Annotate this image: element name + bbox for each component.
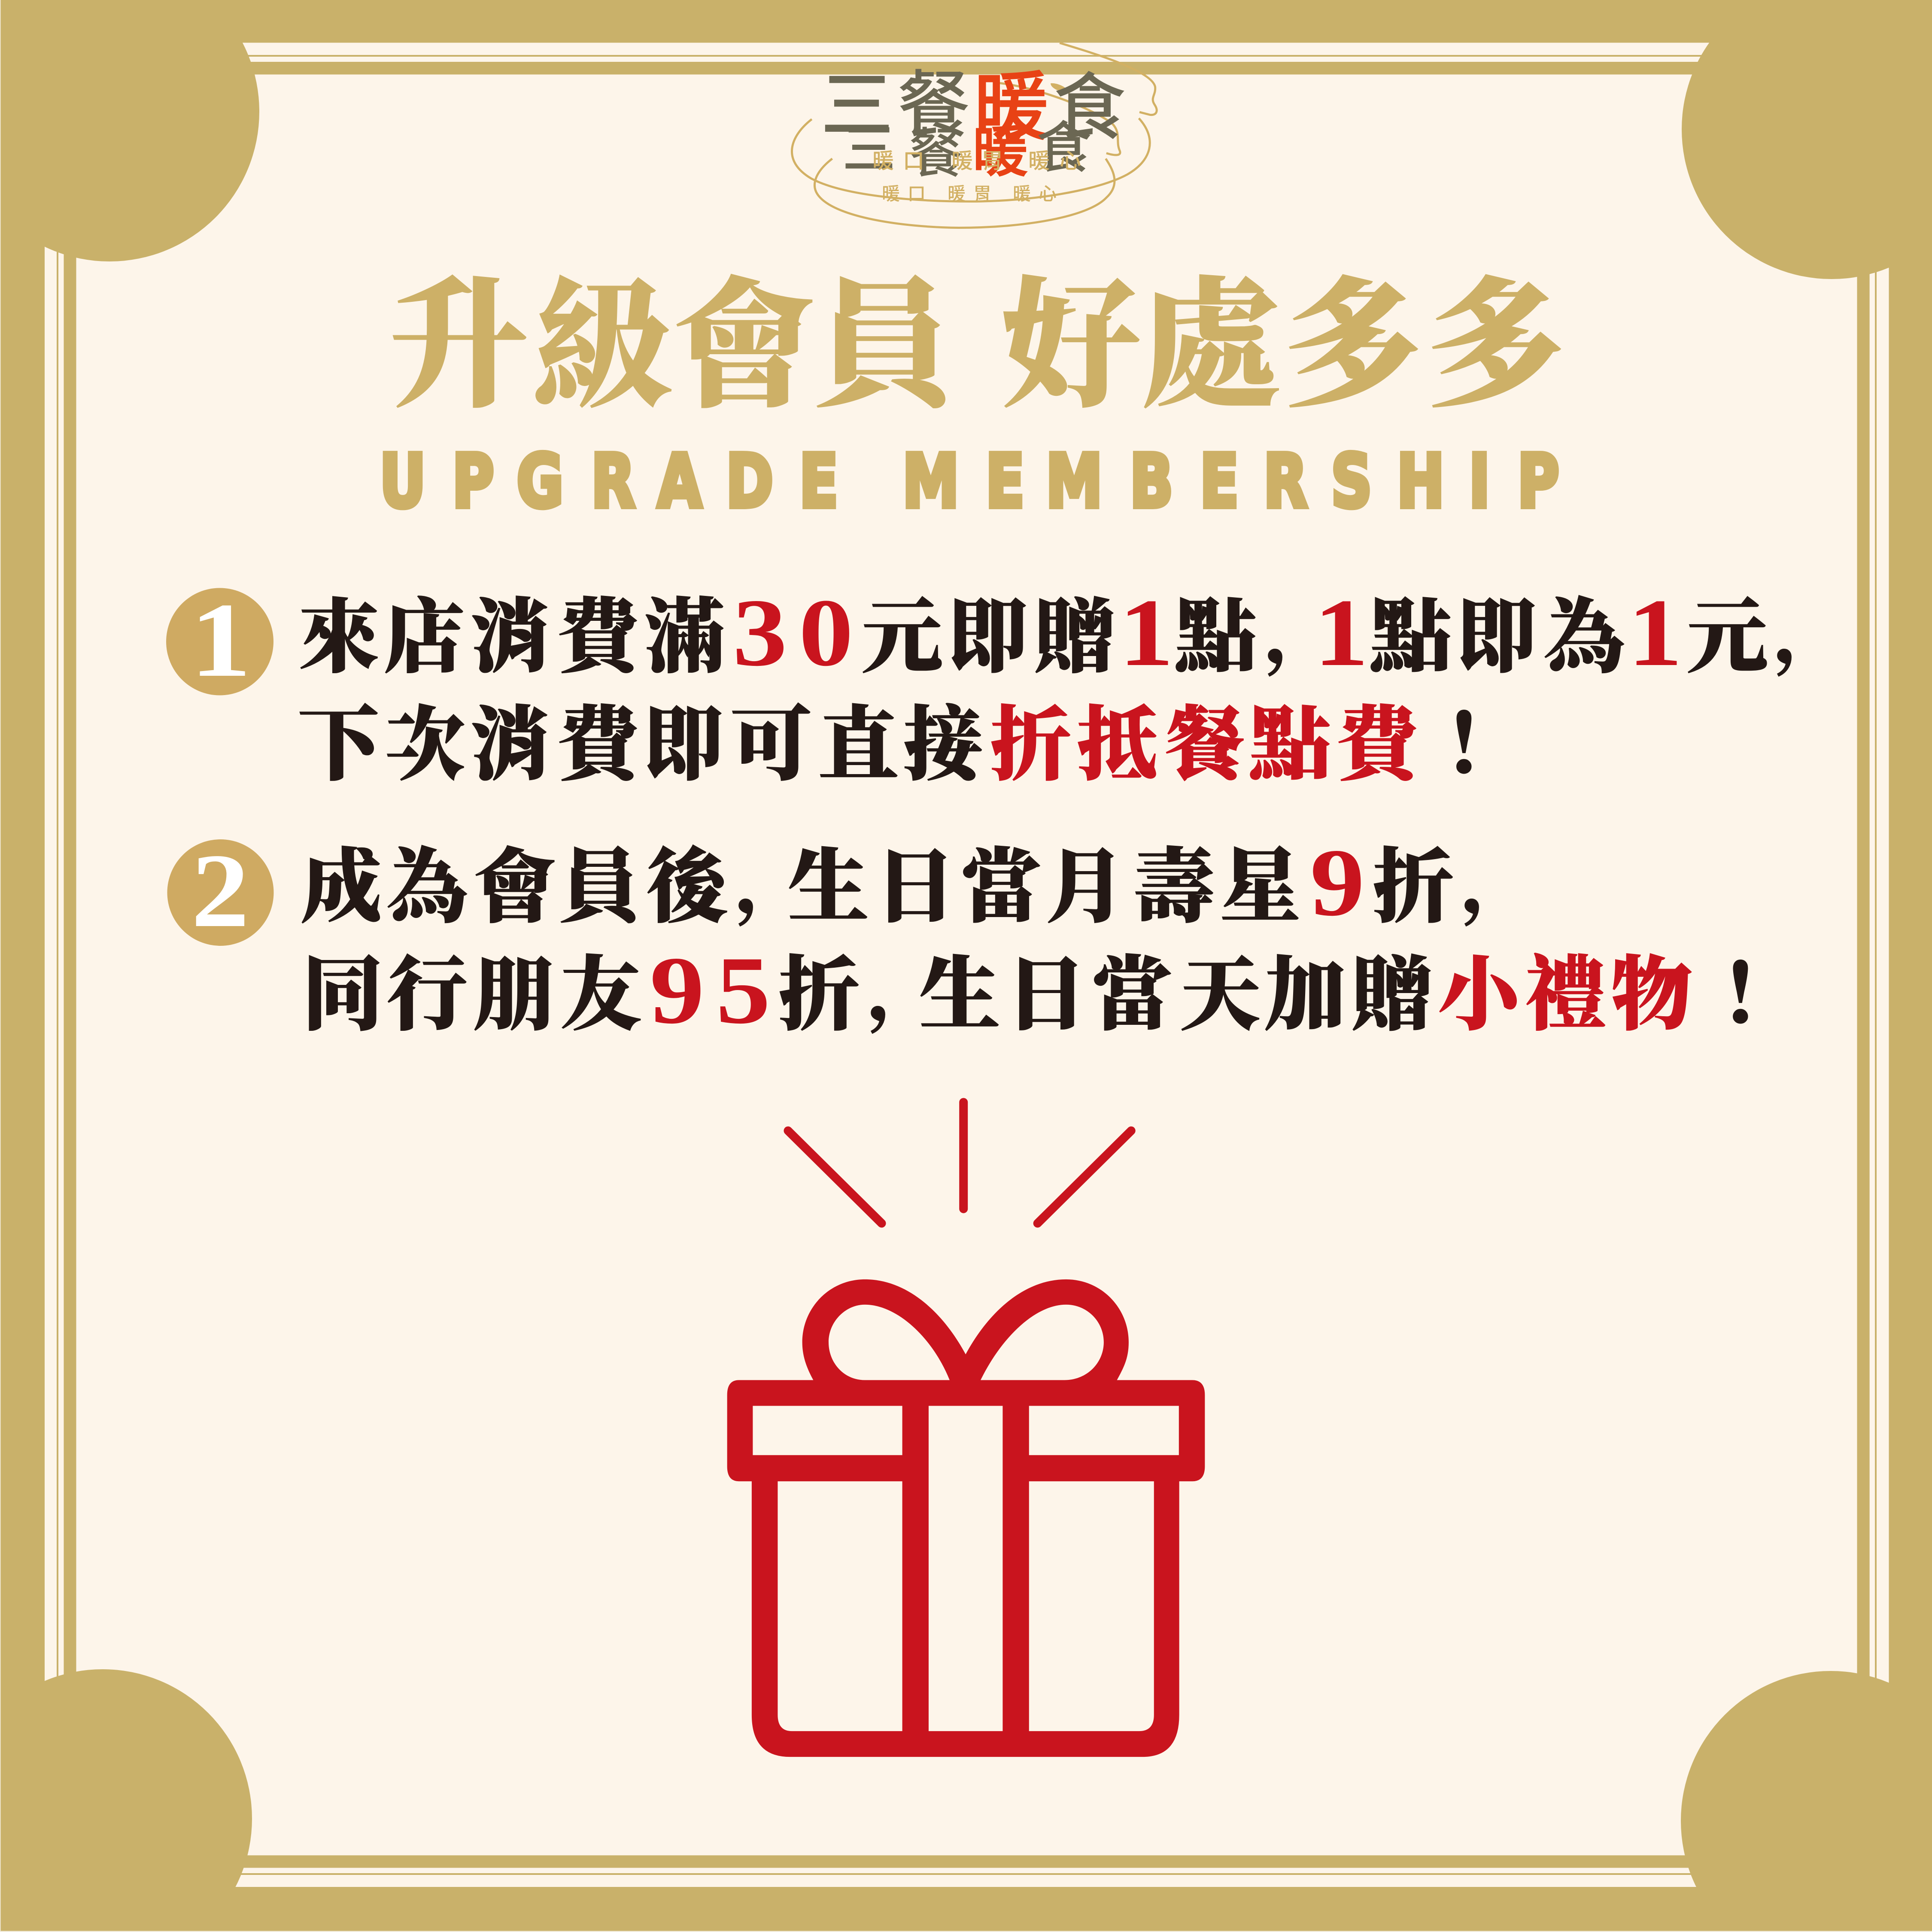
benefit 2 line 1: 折 — [1373, 843, 1454, 933]
benefit 1 line 1: 元 — [1687, 593, 1768, 683]
logo accent small: 暖 — [972, 121, 1028, 183]
subtitle: UPGRADE MEMBERSHIP — [380, 439, 1559, 524]
number badge 1: 1 — [190, 581, 251, 699]
logo rings — [792, 43, 1157, 228]
benefit 2 line 2: ！ — [1720, 951, 1801, 1040]
benefit 2 line 2: 折 — [779, 951, 860, 1040]
benefit 1 line 1: 30 — [732, 579, 854, 686]
logo: 三餐暖食 with rings — [792, 43, 1157, 228]
logo slogan lower: 暖口暖胃暖心 — [882, 184, 1057, 204]
benefit 2 line 2: ， — [869, 956, 937, 1034]
logo slogan upper: 暖口暖胃暖心 — [872, 149, 1081, 173]
logo name small end: 食 — [1036, 117, 1092, 179]
number badge 2 — [167, 832, 274, 949]
benefit 2 line 1: ， — [736, 848, 805, 927]
title: 升級會員 好處多多 — [390, 270, 1567, 425]
number badge 2: 2 — [191, 832, 249, 949]
benefit 1 line 1: 來店消費滿 — [299, 593, 725, 683]
benefit 1 line 1: 1 — [1119, 579, 1174, 686]
logo name large end: 食 — [1053, 67, 1126, 149]
benefit 1 line 1: ， — [1266, 598, 1334, 677]
benefit 2 line 2: 生日當天加贈 — [920, 951, 1432, 1040]
benefit 2 line 1: 成為會員後 — [301, 843, 732, 933]
number badge 1 — [166, 581, 273, 699]
benefit 2 line 1: 9 — [1310, 829, 1365, 936]
benefit 1 line 1 — [299, 579, 1844, 686]
benefit 1 line 2 — [298, 701, 1525, 790]
benefit 2 line 1: ， — [1462, 848, 1531, 927]
benefit 1 line 2: 折抵餐點費 — [990, 701, 1430, 790]
benefit 1 line 2: ！ — [1444, 701, 1525, 790]
benefit 1 line 2: 下次消費即可直接 — [298, 701, 986, 790]
icon: gift box — [727, 1279, 1205, 1757]
benefit 2 line 2: 95 — [650, 936, 771, 1044]
benefit 1 line 1: 1 — [1628, 579, 1683, 686]
benefit 2 line 2: 小禮物 — [1438, 951, 1692, 1040]
benefit 1 line 1: 1 — [1314, 579, 1369, 686]
benefit 2 line 2 — [302, 936, 1801, 1044]
logo name small: 三餐 — [842, 119, 963, 184]
logo accent large: 暖 — [974, 66, 1049, 149]
benefit 2 line 1: 生日當月壽星 — [788, 843, 1300, 933]
benefit 1 line 1: 點即為 — [1370, 593, 1625, 683]
icon: sparkle rays — [788, 1102, 1131, 1223]
benefit 1 line 1: 元即贈 — [862, 593, 1115, 683]
benefit 2 line 2: 同行朋友 — [302, 951, 641, 1040]
benefit 1 line 1: ， — [1775, 598, 1844, 677]
benefit 1 line 1: 點 — [1175, 593, 1256, 683]
logo name large: 三餐 — [820, 65, 970, 146]
benefit 2 line 1 — [301, 829, 1531, 936]
